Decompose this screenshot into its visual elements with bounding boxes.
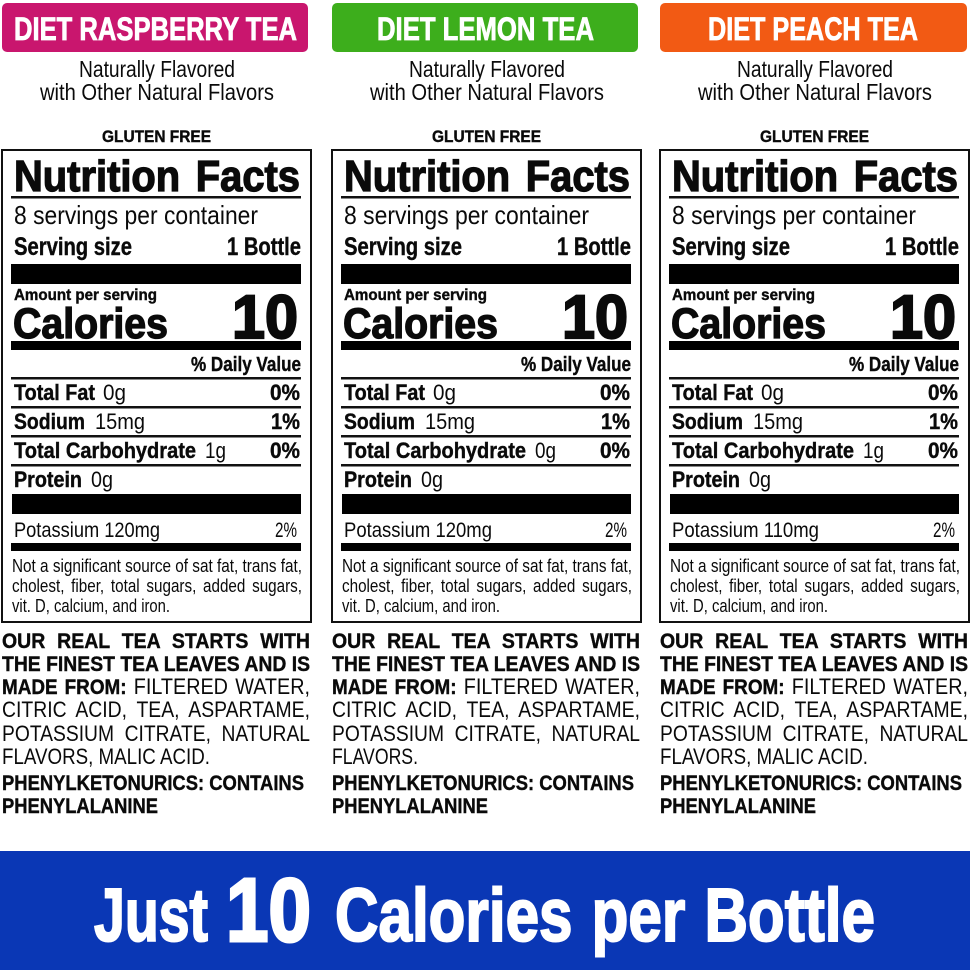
amount per serving: Amount per serving [344, 287, 487, 304]
sodium row: 15mg [95, 409, 145, 434]
total fat row [672, 380, 958, 405]
daily value header: % Daily Value [521, 354, 631, 376]
phenylketonurics warning [2, 772, 304, 818]
ingredients: FLAVORS, MALIC ACID. [660, 744, 868, 769]
phenylketonurics warning: PHENYLALANINE [660, 795, 816, 818]
total carbohydrate row: Total Carbohydrate [14, 438, 196, 463]
total fat row [14, 380, 300, 405]
flavor banner: raspberry: DIET RASPBERRY TEA [14, 11, 297, 47]
protein row: 0g [749, 467, 771, 492]
sodium row [672, 409, 958, 434]
serving size [672, 233, 959, 261]
ingredients: THE FINEST TEA LEAVES AND IS [2, 653, 310, 676]
calories: Calories [13, 300, 168, 348]
footnote: cholest, fiber, total sugars, added sugars, [12, 576, 302, 596]
sodium row: 1% [601, 409, 630, 434]
nutrition facts label [660, 150, 969, 622]
footnote: vit. D, calcium, and iron. [12, 596, 170, 616]
nutrition facts heading: Nutrition Facts [14, 152, 300, 201]
protein row: Protein [14, 467, 82, 492]
gluten free label: GLUTEN FREE [102, 127, 211, 146]
amount per serving: Amount per serving [672, 287, 815, 304]
total fat row: 0% [928, 380, 958, 405]
potassium row: Potassium 120mg [344, 519, 492, 542]
total fat row: Total Fat [14, 380, 96, 405]
serving size: Serving size [672, 233, 790, 261]
ingredients: POTASSIUM CITRATE, NATURAL [2, 721, 310, 746]
potassium row: 2% [275, 519, 297, 542]
total fat row: Total Fat [672, 380, 754, 405]
flavor description [39, 56, 274, 105]
sodium row: Sodium [672, 409, 743, 434]
ingredients: CITRIC ACID, TEA, ASPARTAME, [332, 697, 640, 722]
footnote: Not a significant source of sat fat, trans fat, [12, 556, 302, 576]
serving size: 1 Bottle [557, 233, 631, 261]
total carbohydrate row: 0% [600, 438, 630, 463]
potassium row: Potassium 110mg [672, 519, 819, 542]
potassium row: Potassium 120mg [14, 519, 160, 542]
total fat row: 0g [433, 380, 456, 405]
potassium row [672, 519, 955, 542]
phenylketonurics warning: PHENYLALANINE [2, 795, 158, 818]
flavor description: Naturally Flavored [79, 56, 235, 82]
calories [671, 283, 956, 351]
total carbohydrate row: 1g [205, 438, 226, 463]
total carbohydrate row: 0g [535, 438, 556, 463]
phenylketonurics warning: PHENYLKETONURICS: CONTAINS [332, 772, 634, 795]
protein row: 0g [91, 467, 113, 492]
total fat row: 0% [270, 380, 300, 405]
protein row: Protein [672, 467, 740, 492]
sodium row: 1% [271, 409, 300, 434]
total fat row: 0% [600, 380, 630, 405]
footnote: vit. D, calcium, and iron. [342, 596, 500, 616]
ingredients [332, 630, 640, 769]
calories: Calories [343, 300, 498, 348]
ingredients: CITRIC ACID, TEA, ASPARTAME, [2, 697, 310, 722]
servings per container: 8 servings per container [672, 200, 916, 230]
sodium row: Sodium [14, 409, 85, 434]
protein row: Protein [344, 467, 412, 492]
total carbohydrate row [344, 438, 630, 463]
flavor description: Naturally Flavored [737, 56, 893, 82]
potassium row [14, 519, 297, 542]
phenylketonurics warning: PHENYLALANINE [332, 795, 488, 818]
flavor description: with Other Natural Flavors [39, 79, 274, 105]
total fat row: 0g [761, 380, 784, 405]
panel: diet lemon tea [332, 3, 641, 818]
phenylketonurics warning [332, 772, 634, 818]
nutrition facts label [332, 150, 641, 622]
footnote: cholest, fiber, total sugars, added sugars, [342, 576, 632, 596]
ingredients: OUR REAL TEA STARTS WITH [332, 630, 640, 653]
daily value header: % Daily Value [191, 354, 301, 376]
sodium row: 15mg [753, 409, 803, 434]
serving size: 1 Bottle [227, 233, 301, 261]
total fat row: Total Fat [344, 380, 426, 405]
footnote [12, 556, 302, 616]
total fat row [344, 380, 630, 405]
bottom banner: just 10 calories per bottle: 10 [226, 861, 311, 961]
nutrition facts heading: Nutrition Facts [344, 152, 630, 201]
sodium row: 1% [929, 409, 958, 434]
total carbohydrate row: 1g [863, 438, 884, 463]
total carbohydrate row: 0% [270, 438, 300, 463]
potassium row: 2% [933, 519, 955, 542]
ingredients: FLAVORS. [332, 744, 418, 769]
flavor banner: raspberry [2, 3, 308, 52]
flavor description: with Other Natural Flavors [369, 79, 604, 105]
footnote [670, 556, 960, 616]
calories [13, 283, 298, 351]
calories: 10 [890, 283, 956, 351]
flavor description: with Other Natural Flavors [697, 79, 932, 105]
sodium row: 15mg [425, 409, 475, 434]
bottom banner: just 10 calories per bottle [0, 851, 970, 970]
ingredients [2, 630, 310, 769]
calories [343, 283, 628, 351]
gluten free label: GLUTEN FREE [760, 127, 869, 146]
flavor banner: lemon [332, 3, 638, 52]
flavor banner: peach: DIET PEACH TEA [708, 11, 918, 47]
total carbohydrate row: Total Carbohydrate [344, 438, 526, 463]
total carbohydrate row: Total Carbohydrate [672, 438, 854, 463]
bottom banner: just 10 calories per bottle: Just [94, 873, 208, 957]
footnote [342, 556, 632, 616]
panel: diet raspberry tea [2, 3, 311, 818]
total carbohydrate row [672, 438, 958, 463]
phenylketonurics warning: PHENYLKETONURICS: CONTAINS [2, 772, 304, 795]
servings per container: 8 servings per container [344, 200, 589, 230]
serving size [344, 233, 631, 261]
total carbohydrate row: 0% [928, 438, 958, 463]
serving size [14, 233, 301, 261]
gluten free label: GLUTEN FREE [432, 127, 541, 146]
serving size: Serving size [14, 233, 132, 261]
servings per container: 8 servings per container [14, 200, 258, 230]
ingredients [660, 630, 968, 769]
amount per serving: Amount per serving [14, 287, 157, 304]
ingredients: POTASSIUM CITRATE, NATURAL [332, 721, 640, 746]
ingredients: THE FINEST TEA LEAVES AND IS [332, 653, 640, 676]
serving size: Serving size [344, 233, 462, 261]
total fat row: 0g [103, 380, 126, 405]
sodium row: Sodium [344, 409, 415, 434]
footnote: Not a significant source of sat fat, trans fat, [342, 556, 632, 576]
ingredients: MADE FROM: FILTERED WATER, [332, 674, 640, 699]
flavor description: Naturally Flavored [409, 56, 565, 82]
potassium row: 2% [605, 519, 627, 542]
calories: Calories [671, 300, 826, 348]
sodium row [14, 409, 300, 434]
ingredients: MADE FROM: FILTERED WATER, [2, 674, 310, 699]
ingredients: OUR REAL TEA STARTS WITH [2, 630, 310, 653]
panel: diet peach tea [660, 3, 969, 818]
protein row: 0g [421, 467, 443, 492]
flavor banner: peach [660, 3, 967, 52]
nutrition facts label [2, 150, 311, 622]
flavor description [369, 56, 604, 105]
sodium row [344, 409, 630, 434]
ingredients: FLAVORS, MALIC ACID. [2, 744, 210, 769]
total carbohydrate row [14, 438, 300, 463]
flavor banner: lemon: DIET LEMON TEA [377, 11, 594, 47]
potassium row [344, 519, 627, 542]
flavor description [697, 56, 932, 105]
calories: 10 [562, 283, 628, 351]
phenylketonurics warning [660, 772, 962, 818]
footnote: vit. D, calcium, and iron. [670, 596, 828, 616]
calories: 10 [232, 283, 298, 351]
